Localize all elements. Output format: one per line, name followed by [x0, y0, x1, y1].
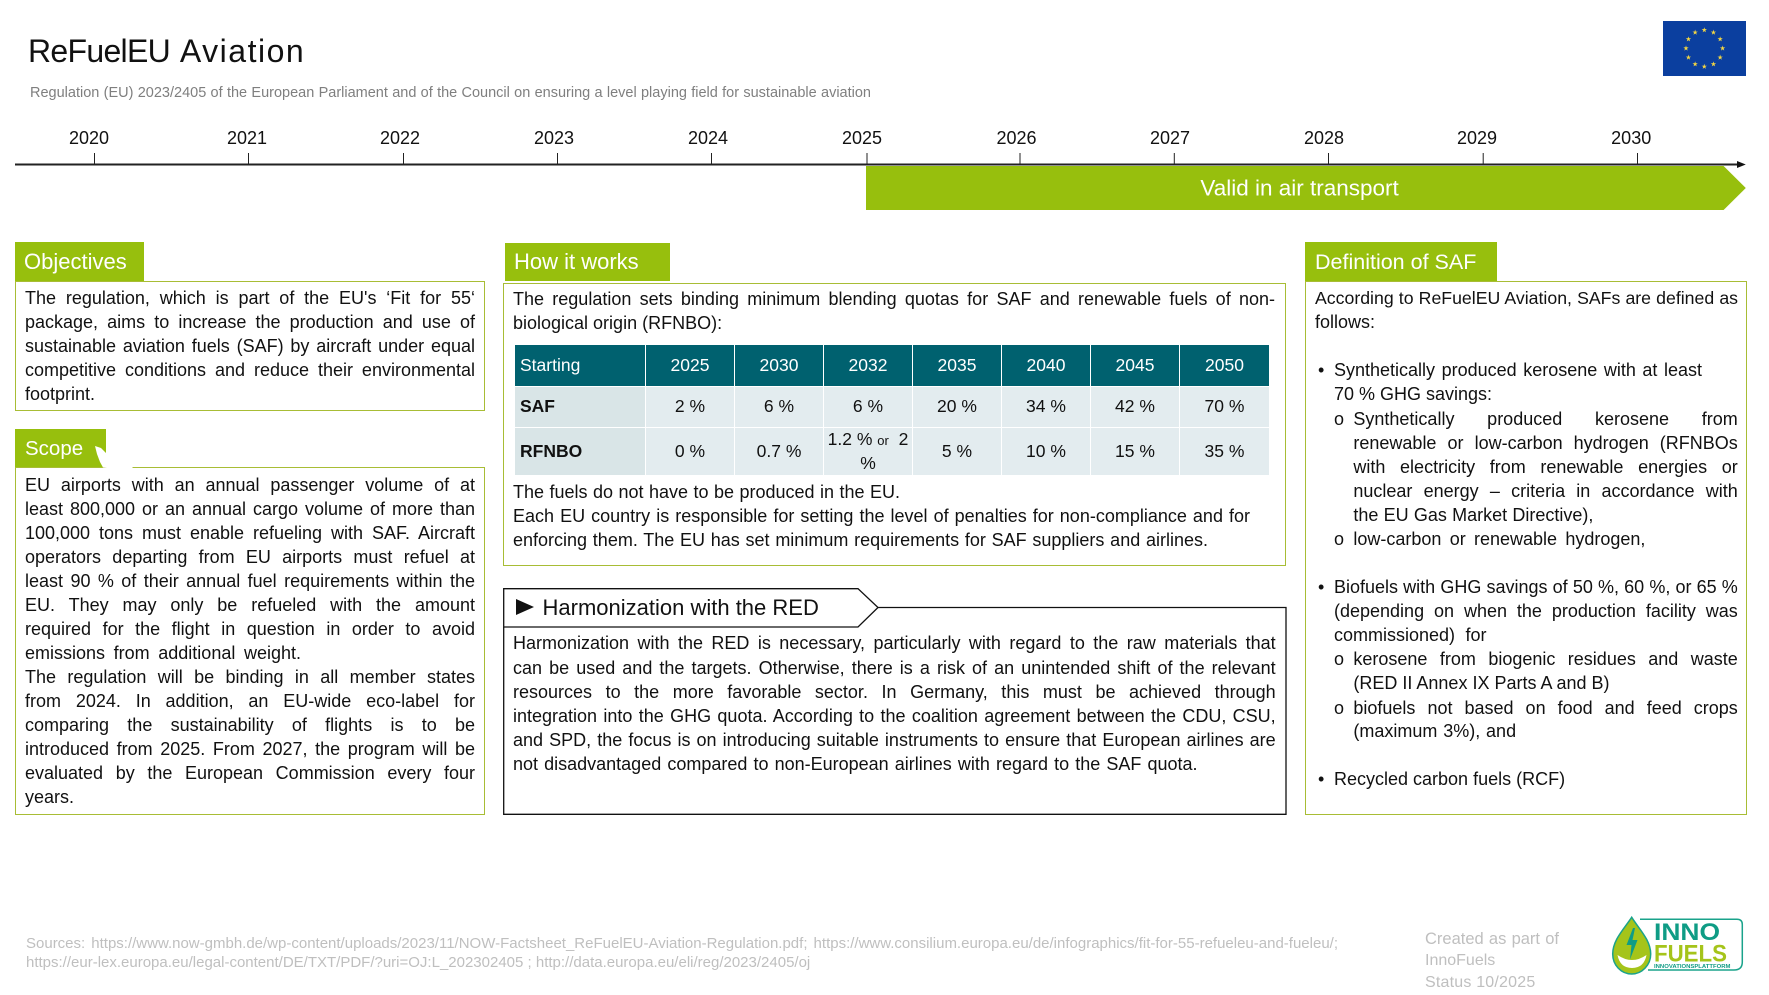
creation note: InnoFuels [1425, 952, 1495, 969]
text box: how it works [503, 283, 1286, 566]
text block: definition of SAF: • [1318, 769, 1324, 789]
text block: definition of SAF: low-carbon or renewable hydrogen, [1353, 529, 1645, 549]
creation note [1425, 930, 1559, 991]
text block: definition of SAF: Synthetically produced kerosene from [1353, 409, 1738, 429]
timeline year labels: 2025 [842, 128, 882, 148]
text block: harmonization: Harmonization with the RED is necessary, particularly with regard to the raw materials that [513, 633, 1276, 653]
panel: definition of SAF [1305, 242, 1747, 815]
text block: harmonization: resources to the more favorable sector. In Germany, this must be achieved through [513, 682, 1276, 702]
text block: definition of SAF: o [1334, 698, 1344, 718]
panel: objectives [15, 242, 485, 411]
sources [26, 935, 1338, 971]
timeline year labels: 2028 [1304, 128, 1344, 148]
text block: definition of SAF: • [1318, 577, 1324, 597]
heading: scope [15, 429, 106, 467]
panel: how it works [503, 243, 1286, 566]
timeline year labels: 2022 [380, 128, 420, 148]
text block: objectives: package, aims to increase the production and use of [25, 312, 475, 332]
timeline year labels: 2020 [69, 128, 109, 148]
icon: InnoFuels logo: FUELS [1654, 940, 1727, 968]
text block: scope: introduced from 2025. From 2027, the program will be [25, 739, 475, 759]
text block: definition of SAF: (maximum 3%), and [1353, 721, 1516, 741]
table: blending quotas: 2030 [760, 355, 798, 375]
text block: definition of SAF: Biofuels with GHG savings of 50 %, 60 %, or 65 % [1334, 577, 1738, 597]
text block: definition of SAF: 70 % GHG savings: [1334, 384, 1492, 404]
text block: definition of SAF: follows: [1315, 312, 1375, 332]
text block: definition of SAF: the EU Gas Market Directive), [1353, 505, 1593, 525]
timeline year labels: 2026 [996, 128, 1037, 148]
intro text [513, 289, 1275, 333]
text box: how it works: enforcing them. The EU has set minimum requirements for SAF suppliers and airlines. [513, 530, 1208, 550]
creation note: Status 10/2025 [1425, 974, 1535, 991]
table: blending quotas: 5 % [942, 441, 972, 461]
text block: definition of SAF: According to ReFuelEU Aviation, SAFs are defined as [1315, 288, 1738, 308]
intro text: The regulation sets binding minimum blending quotas for SAF and renewable fuels of non- [513, 289, 1275, 309]
creation note: Created as part of [1425, 930, 1559, 948]
table: blending quotas: SAF [520, 396, 555, 416]
icon: InnoFuels logo: INNO [1654, 919, 1720, 946]
timeline year labels: 2023 [534, 128, 574, 148]
text block: definition of SAF: • [1318, 360, 1324, 380]
table: blending quotas: 35 % [1205, 441, 1244, 461]
icon: white plane artifact [95, 446, 133, 468]
text block: scope: from 2024. In addition, an EU-wide eco-label for [25, 691, 475, 711]
table: blending quotas: 2025 [671, 355, 709, 375]
text block: scope: EU. They may only be refueled with the amount [25, 595, 475, 615]
text block: scope: operators departing from EU airports must refuel at [25, 547, 475, 567]
text block: scope: emissions from additional weight. [25, 643, 301, 663]
heading: harmonization: Harmonization with the RED [542, 595, 819, 620]
table: blending quotas: 2045 [1116, 355, 1154, 375]
intro text: biological origin (RFNBO): [513, 313, 722, 333]
text block: scope: least 90 % of their annual fuel requirements within the [25, 571, 475, 591]
table: blending quotas: 6 % [764, 396, 794, 416]
table: blending quotas: % [860, 452, 876, 472]
panel: scope [15, 429, 485, 815]
sources: Sources: https://www.now-gmbh.de/wp-content/uploads/2023/11/NOW-Factsheet_ReFuelEU-Aviation-Regulation.pdf; https://www.consilium.europa.eu/de/infographics/fit-for-55-refueleu-and-fueleu/; [26, 935, 1338, 952]
text block: definition of SAF: commissioned) for [1334, 625, 1486, 645]
table: blending quotas: 0 % [675, 441, 705, 461]
text block: scope: The regulation will be binding in all member states [25, 667, 475, 687]
text block: objectives: competitive conditions and reduce their environmental [25, 360, 475, 380]
text block: objectives: The regulation, which is part of the EU's ‘Fit for 55‘ [25, 288, 475, 308]
table: blending quotas: 2035 [938, 355, 976, 375]
text block: scope: years. [25, 787, 74, 807]
text block: definition of SAF: Synthetically produced kerosene with at least [1334, 360, 1702, 380]
text block: definition of SAF: with electricity from renewable energies or [1353, 457, 1738, 477]
text block: definition of SAF: renewable or low-carbon hydrogen (RFNBOs [1353, 433, 1738, 453]
panel: harmonization with the RED [503, 588, 1287, 815]
text box: how it works: The fuels do not have to be produced in the EU. [513, 482, 900, 502]
table: blending quotas: 2040 [1027, 355, 1065, 375]
timeline year labels: 2021 [227, 128, 267, 148]
table: blending quotas: 34 % [1026, 396, 1066, 416]
heading: how it works [505, 243, 670, 281]
text block: harmonization: can be used and the targets. Otherwise, there is a risk of an unintended shift of the relevant [513, 658, 1276, 678]
table: blending quotas: 42 % [1115, 396, 1155, 416]
heading: definition of SAF [1305, 242, 1497, 281]
table: blending quotas: 1.2 % or 2 [828, 428, 908, 448]
text block: definition of SAF [1305, 281, 1746, 815]
table: blending quotas: 20 % [937, 396, 977, 416]
icon: InnoFuels logo [1612, 916, 1744, 975]
panel outline with heading pentagon [503, 588, 1287, 815]
timeline [15, 128, 1746, 210]
table: blending quotas: RFNBO [520, 441, 582, 461]
table: blending quotas: Starting [520, 355, 580, 375]
text block: definition of SAF: nuclear energy – criteria in accordance with [1353, 481, 1738, 501]
sources: https://eur-lex.europa.eu/legal-content/DE/TXT/PDF/?uri=OJ:L_202302405 ; http://data.europa.eu/eli/reg/2023/2405/oj [26, 954, 810, 971]
text block: definition of SAF: (RED II Annex IX Parts A and B) [1353, 673, 1610, 693]
heading: objectives [15, 242, 144, 281]
text block: scope: comparing the sustainability of flights is to be [25, 715, 475, 735]
icon: EU flag [1663, 21, 1746, 76]
timeline year labels: 2027 [1150, 128, 1190, 148]
text block: harmonization: not disadvantaged compared to non-European airlines with regard to the SAF quota. [513, 754, 1198, 774]
text block: harmonization [513, 633, 1276, 774]
timeline axis [15, 153, 1746, 168]
subtitle: Regulation (EU) 2023/2405 of the European Parliament and of the Council on ensuring a level playing field for sustainable aviation [30, 84, 871, 100]
timeline year labels: 2029 [1457, 128, 1497, 148]
text block: scope: 100,000 tons must enable refueling with SAF. Aircraft [25, 523, 475, 543]
text block: objectives: footprint. [25, 384, 95, 404]
text box: how it works: Each EU country is responsible for setting the level of penalties for non-compliance and for [513, 506, 1250, 526]
timeline year labels: 2024 [688, 128, 728, 148]
text block: definition of SAF: o [1334, 409, 1344, 429]
table: blending quotas: 2 % [675, 396, 705, 416]
heading: definition of SAF: Definition of SAF [1315, 250, 1476, 274]
text block: scope: evaluated by the European Commission every four [25, 763, 475, 783]
text block: scope: least 800,000 or an annual cargo volume of more than [25, 499, 475, 519]
text block: harmonization: and SPD, the focus is on introducing suitable instruments to ensure that European airlines are [513, 730, 1276, 750]
arrow: valid in air transport: Valid in air transport [1200, 176, 1400, 200]
table: blending quotas [515, 345, 1269, 475]
text block: objectives: sustainable aviation fuels (SAF) by aircraft under equal [25, 336, 475, 356]
text block: scope: required for the flight in question in order to avoid [25, 619, 475, 639]
table: blending quotas: 2032 [849, 355, 887, 375]
timeline year labels [69, 128, 1651, 148]
text block: definition of SAF: Recycled carbon fuels (RCF) [1334, 769, 1565, 789]
closing text [513, 482, 1250, 550]
table: blending quotas: 70 % [1205, 396, 1244, 416]
text block: scope: EU airports with an annual passenger volume of at [25, 474, 475, 494]
arrow: valid in air transport [866, 166, 1746, 210]
timeline year labels: 2030 [1611, 128, 1651, 148]
text block: harmonization: integration into the GHG quota. According to the coalition agreement between the CDU, CSU, [513, 706, 1276, 726]
heading: how it works: How it works [514, 249, 639, 274]
text block: definition of SAF: biofuels not based on food and feed crops [1353, 698, 1738, 718]
heading: scope: Scope [25, 437, 83, 460]
text block: definition of SAF: o [1334, 649, 1344, 669]
table: blending quotas: 15 % [1115, 441, 1155, 461]
table: blending quotas: 10 % [1026, 441, 1066, 461]
text block: definition of SAF: (depending on when the production facility was [1334, 601, 1738, 621]
title: ReFuelEU Aviation [28, 33, 305, 69]
text block: definition of SAF: kerosene from biogenic residues and waste [1353, 649, 1738, 669]
table: blending quotas: 6 % [853, 396, 883, 416]
table: blending quotas: 2050 [1205, 355, 1244, 375]
text block: scope [15, 467, 485, 815]
table: blending quotas: 0.7 % [757, 441, 801, 461]
text block: objectives [15, 281, 485, 411]
text block: definition of SAF: o [1334, 529, 1344, 549]
heading: objectives: Objectives [24, 249, 127, 274]
icon: InnoFuels logo: INNOVATIONSPLATTFORM [1654, 964, 1731, 970]
